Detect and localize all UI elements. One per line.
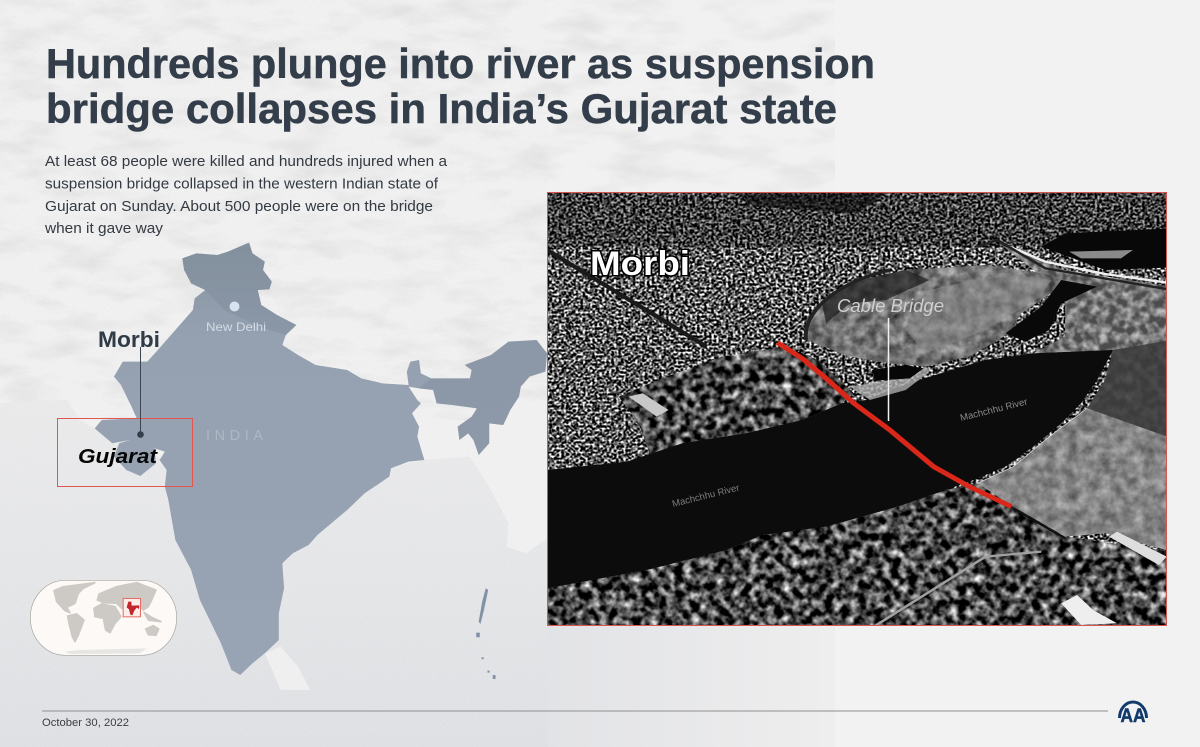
label: INDIA: INDIA [206,428,263,444]
background map [0,0,835,747]
satellite image panel [547,192,1172,627]
label: Cable Bridge: Cable Bridge [837,296,944,316]
label: Morbi on image: Morbi [590,245,690,283]
bridge line [777,343,1011,507]
Gujarat highlight box [58,418,192,486]
title: bridge collapses in India’s Gujarat state [46,85,837,132]
footer rule [42,710,1108,712]
label: Gujarat: Gujarat [78,445,158,468]
label: Machchhu River lower: Machchhu River [671,483,741,510]
Morbi marker [98,327,160,438]
Andaman islands [476,588,496,679]
image border [548,192,1166,626]
label: New Delhi: New Delhi [206,320,266,334]
description text: when it gave way [44,221,164,237]
date: October 30, 2022 [42,717,129,729]
lake tones [822,270,930,323]
title: Hundreds plunge into river as suspension [46,40,875,87]
pointer line [888,318,890,421]
description text: suspension bridge collapsed in the western Indian state of [45,176,439,192]
Morbi marker: Morbi [98,327,160,352]
description text: At least 68 people were killed and hundreds injured when a [45,154,448,170]
label: New Delhi [206,302,266,334]
dark land east of river [1087,341,1166,436]
India locator [123,598,140,617]
description text: Gujarat on Sunday. About 500 people were on the bridge [45,199,433,215]
label: Machchhu River upper: Machchhu River [959,397,1029,424]
world locator map [30,580,177,655]
description text [44,154,448,237]
water: Machchhu River [547,350,1113,588]
map of India [95,243,547,679]
title [46,40,875,132]
logo: AA: AA [1120,706,1146,727]
